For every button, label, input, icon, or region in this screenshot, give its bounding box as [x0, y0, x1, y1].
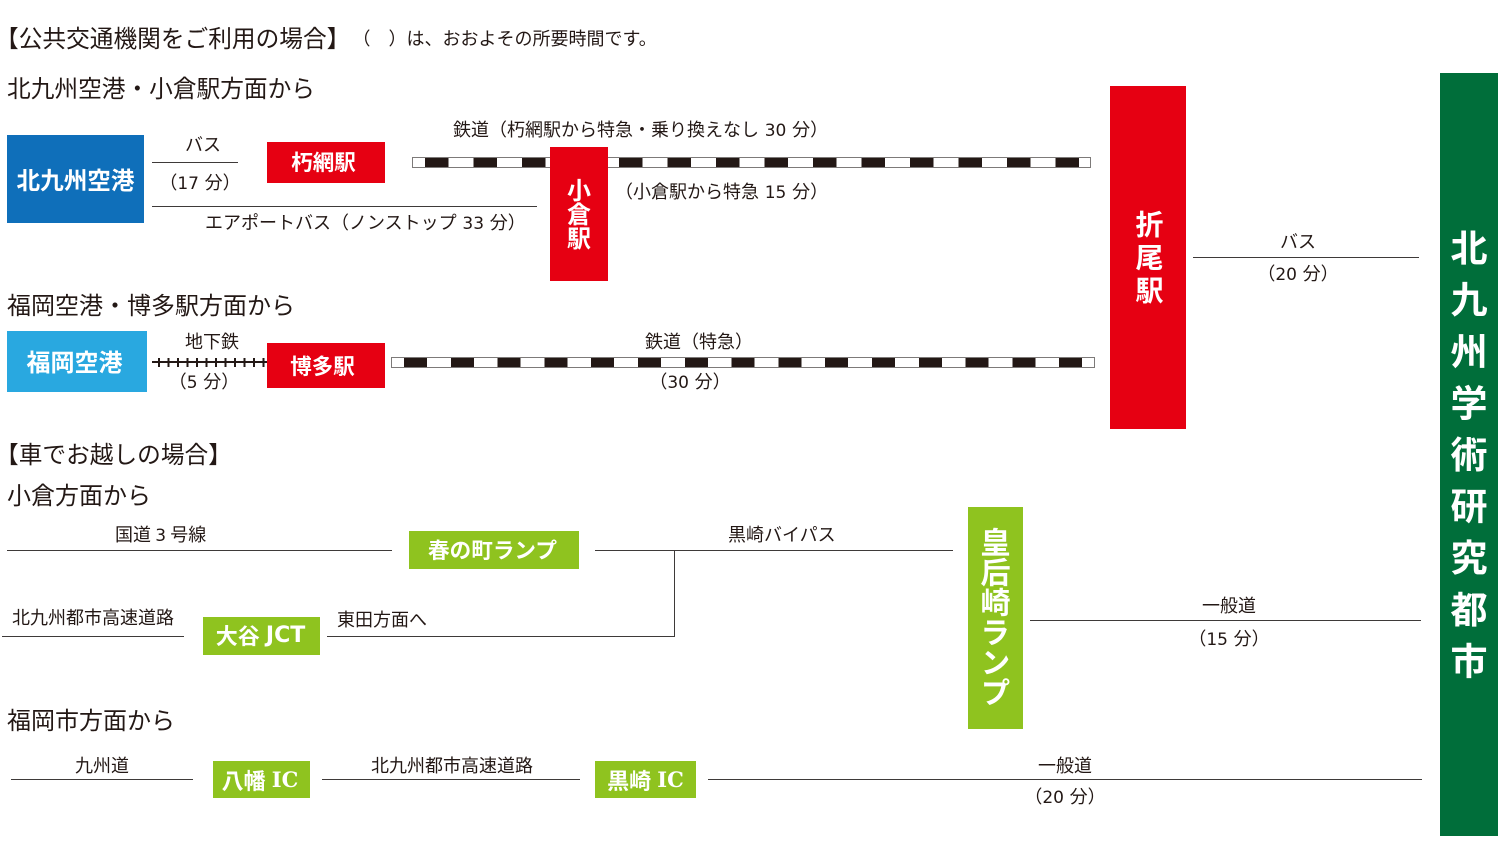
line: bus — [152, 162, 238, 163]
label: Kitakyushu expressway 2: 北九州都市高速道路 — [371, 756, 533, 777]
label: Kurosaki bypass: 黒崎バイパス — [728, 525, 836, 546]
box: Kutsunoashi station: 朽網駅 — [291, 151, 356, 175]
label: Kitakyushu expressway: 北九州都市高速道路 — [12, 608, 174, 629]
heading: from Fukuoka airport: 福岡空港・博多駅方面から — [7, 293, 295, 320]
label: 20 minutes: （20 分） — [1257, 264, 1339, 285]
box: Otani JCT: JCT — [266, 622, 305, 648]
box: Kitakyushu airport: 北九州空港 — [17, 169, 134, 195]
box: Kurosaki IC — [595, 761, 696, 798]
box: Kokura station — [550, 147, 608, 281]
box: Kitakyushu airport — [7, 135, 144, 223]
box: Harunomachi ramp — [409, 531, 579, 569]
label: nonstop airport bus: エアポートバス（ノンストップ 33 分） — [205, 213, 526, 234]
line: bus to campus — [1193, 257, 1419, 258]
label: general road: 一般道 — [1202, 596, 1256, 617]
label: route 3: 国道 3 号線 — [115, 525, 206, 546]
label: subway: 地下鉄 — [185, 332, 239, 353]
line: route 3 — [7, 550, 392, 551]
railway: Hakata to Orio — [391, 357, 1095, 368]
box: Hakata station — [267, 343, 385, 388]
line: general road 2 — [708, 779, 1422, 780]
label: railway express 30 minutes: 鉄道（朽網駅から特急・乗り換えなし 30 分） — [453, 120, 828, 141]
line: Kitakyushu expressway — [2, 636, 184, 637]
box: Fukuoka airport — [7, 331, 147, 392]
box: Kurosaki IC: 黒崎 — [607, 768, 651, 794]
heading: from Kitakyushu airport: 北九州空港・小倉駅方面から — [7, 77, 315, 103]
box: Hakata station: 博多駅 — [290, 354, 355, 378]
heading: by car: 【車でお越しの場合】 — [0, 443, 232, 469]
label: 20 minutes 2: （20 分） — [1024, 787, 1106, 808]
box: Otani JCT — [203, 617, 320, 655]
heading: public transport: 【公共交通機関をご利用の場合】 — [0, 27, 350, 53]
box: Kutsunoashi station — [267, 142, 385, 183]
box: Kokura station: 小倉駅 — [562, 178, 590, 250]
box: Kokozaki ramp: 皇后崎ランプ — [976, 527, 1008, 707]
line: connector vertical — [674, 550, 675, 637]
line: Kurosaki bypass — [595, 550, 953, 551]
banner: Kitakyushu Science and Research Park: 北九州学術研究都市 — [1445, 229, 1486, 694]
line: Kyushu expressway — [11, 779, 193, 780]
box: Fukuoka airport: 福岡空港 — [26, 350, 122, 376]
box: Kurosaki IC: IC — [657, 767, 684, 792]
railway: Kutsunoashi to Orio — [412, 157, 1091, 168]
label: Kyushu expressway: 九州道 — [75, 756, 129, 777]
label: general road 2: 一般道 — [1038, 756, 1092, 777]
box: Kokozaki ramp — [968, 507, 1023, 729]
line: Kitakyushu expressway 2 — [322, 779, 580, 780]
label: 5 minutes: （5 分） — [169, 372, 239, 393]
label: to Higashida: 東田方面へ — [337, 610, 427, 631]
box: Harunomachi ramp: 春の町ランプ — [428, 538, 557, 562]
box: Yahata IC — [213, 761, 310, 798]
label: bus to campus: バス — [1280, 232, 1316, 253]
heading: from Fukuoka city: 福岡市方面から — [7, 708, 175, 735]
railway: subway track — [152, 358, 267, 367]
line: to Higashida — [327, 636, 675, 637]
line: general road — [1030, 620, 1421, 621]
box: Otani JCT: 大谷 — [216, 624, 260, 649]
box: Yahata IC: 八幡 — [222, 768, 266, 794]
box: Orio station — [1110, 86, 1186, 429]
label: bus: バス — [185, 135, 221, 156]
line: airport bus — [152, 206, 537, 207]
banner: Kitakyushu Science and Research Park — [1440, 73, 1498, 836]
label: railway express: 鉄道（特急） — [645, 332, 753, 353]
label: from Kokura express: （小倉駅から特急 15 分） — [615, 182, 828, 203]
box: Orio station: 折尾駅 — [1132, 210, 1164, 309]
box: Yahata IC: IC — [272, 767, 298, 792]
heading: from Kokura: 小倉方面から — [7, 483, 151, 510]
label: 30 minutes: （30 分） — [649, 372, 731, 393]
label: 17 minutes: （17 分） — [159, 173, 241, 194]
note: approximate time: （ ）は、おおよその所要時間です。 — [352, 29, 657, 50]
label: 15 minutes: （15 分） — [1188, 629, 1270, 650]
